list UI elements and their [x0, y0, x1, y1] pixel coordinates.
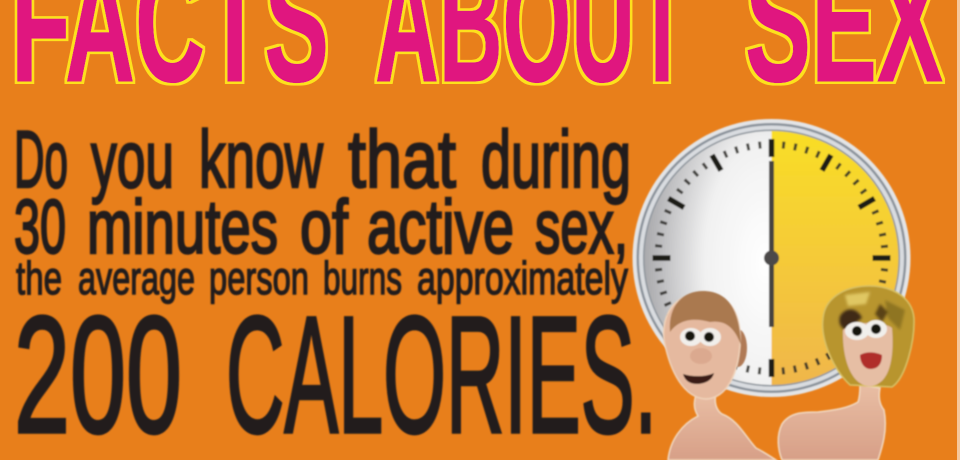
woman hair [823, 286, 914, 387]
line 1: you [91, 115, 174, 205]
line 1 [14, 115, 631, 205]
woman lips [860, 352, 882, 369]
woman eyes [845, 320, 887, 340]
title [11, 0, 943, 118]
line 3: person [209, 252, 309, 304]
line 1: during [481, 115, 631, 205]
stopwatch clock [632, 119, 910, 397]
hour ticks [652, 139, 890, 377]
clay figure: man [664, 291, 776, 460]
yellow half of dial [772, 131, 898, 385]
woman torso [778, 385, 885, 460]
line 1: that [348, 115, 456, 205]
line 3: average [78, 252, 195, 304]
white half of dial [644, 131, 772, 385]
man head [664, 293, 740, 399]
body text [14, 115, 657, 460]
man hair [670, 291, 741, 345]
line 3 [16, 252, 628, 304]
line 2: sex, [535, 185, 628, 270]
man eyes [680, 328, 721, 346]
woman hair highlights [839, 292, 905, 330]
clock hand [769, 161, 774, 327]
man nose [690, 348, 712, 364]
line 3: the [16, 252, 62, 304]
minute ticks [658, 144, 885, 372]
line 4: 200 calories [14, 283, 657, 460]
clock hub [764, 250, 779, 266]
line 3: burns [323, 252, 402, 304]
line 2: of [300, 185, 349, 270]
line 1: know [199, 115, 323, 205]
clock bezel [632, 119, 910, 397]
man mouth [683, 373, 714, 384]
line 2: active [367, 185, 514, 270]
line 1: Do [14, 115, 68, 205]
line 2: minutes [87, 185, 278, 270]
line 2: 30 [14, 185, 66, 270]
clay figure: woman [778, 286, 914, 460]
woman face [843, 323, 893, 386]
line 2 [14, 185, 628, 270]
line 3: approximately [417, 252, 628, 304]
man ear [729, 329, 747, 367]
man torso [668, 394, 776, 460]
